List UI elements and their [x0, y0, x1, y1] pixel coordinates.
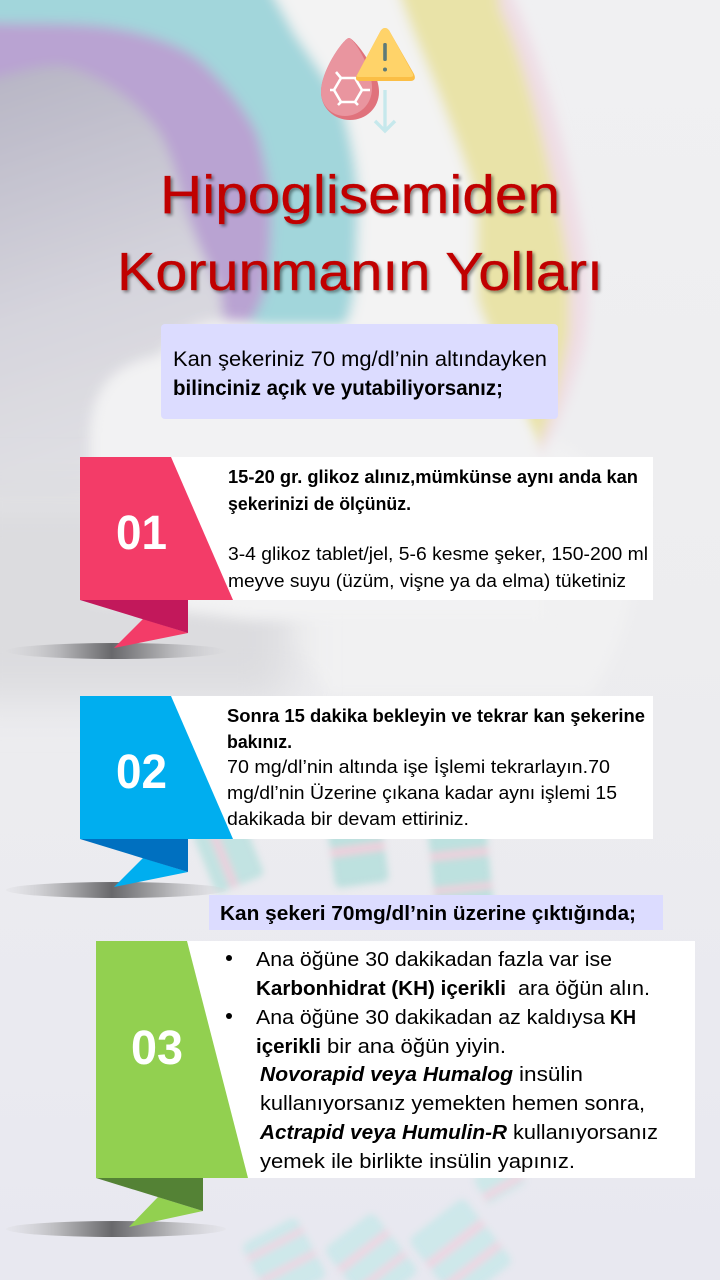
candies [192, 814, 526, 1280]
panel: step 03: Ana öğüne 30 dakikadan fazla var ise [256, 948, 612, 971]
title: Korunmanın Yolları [117, 242, 603, 302]
panel: step 03: ara öğün alın. [518, 977, 650, 1000]
heading: blood sugar above 70: Kan şekeri 70mg/dl’nin üzerine çıktığında; [220, 903, 636, 925]
callout: blood sugar below 70 [161, 324, 558, 419]
panel: step 03: içerikli [256, 1035, 321, 1058]
panel: step 02: 02 [116, 746, 167, 799]
panel: step 03: 03 [131, 1022, 183, 1075]
panel: step 01: 3-4 glikoz tablet/jel, 5-6 kesme şeker, 150-200 ml [228, 543, 648, 564]
panel: step 01: şekerinizi de ölçünüz. [228, 493, 411, 514]
panel: step 02: dakikada bir devam ettiriniz. [227, 808, 469, 829]
panel: step 02: mg/dl’nin Üzerine çıkana kadar aynı işlemi 15 [227, 782, 617, 803]
panel: step 03: Actrapid veya Humulin-R [259, 1121, 507, 1144]
panel: step 01: meyve suyu (üzüm, vişne ya da elma) tüketiniz [228, 570, 626, 591]
panel: step 03: Karbonhidrat (KH) içerikli [256, 977, 506, 1000]
title [117, 165, 603, 302]
panel: step 03: Ana öğüne 30 dakikadan az kaldıysa [256, 1006, 606, 1029]
panel: step 02: bakınız. [227, 731, 292, 752]
panel: step 01: 01 [116, 507, 167, 560]
panel: step 03: kullanıyorsanız yemekten hemen sonra, [260, 1092, 645, 1115]
panel: step 03: kullanıyorsanız [513, 1121, 658, 1144]
panel: step 03: Novorapid veya Humalog [260, 1063, 513, 1086]
panel: step 01 [6, 457, 653, 659]
panel: step 03: insülin [519, 1063, 583, 1086]
icon: blood drop with warning triangle and down arrow [321, 28, 415, 131]
callout: blood sugar below 70: bilinciniz açık ve yutabiliyorsanız; [173, 377, 503, 400]
panel: step 01: 15-20 gr. glikoz alınız,mümkünse aynı anda kan [228, 466, 638, 487]
panel: step 02 [6, 696, 653, 898]
heading: blood sugar above 70 [209, 895, 663, 930]
panel: step 02: 70 mg/dl’nin altında işe İşlemi tekrarlayın.70 [227, 756, 610, 777]
panel: step 03: bir ana öğün yiyin. [327, 1035, 506, 1058]
panel: step 03: KH [610, 1006, 636, 1029]
callout: blood sugar below 70: Kan şekeriniz 70 mg/dl’nin altındayken [173, 348, 547, 371]
panel: step 03: yemek ile birlikte insülin yapınız. [260, 1150, 575, 1173]
panel: step 02: Sonra 15 dakika bekleyin ve tekrar kan şekerine [227, 705, 645, 726]
panel: step 03 [6, 941, 695, 1237]
title: Hipoglisemiden [160, 165, 560, 225]
